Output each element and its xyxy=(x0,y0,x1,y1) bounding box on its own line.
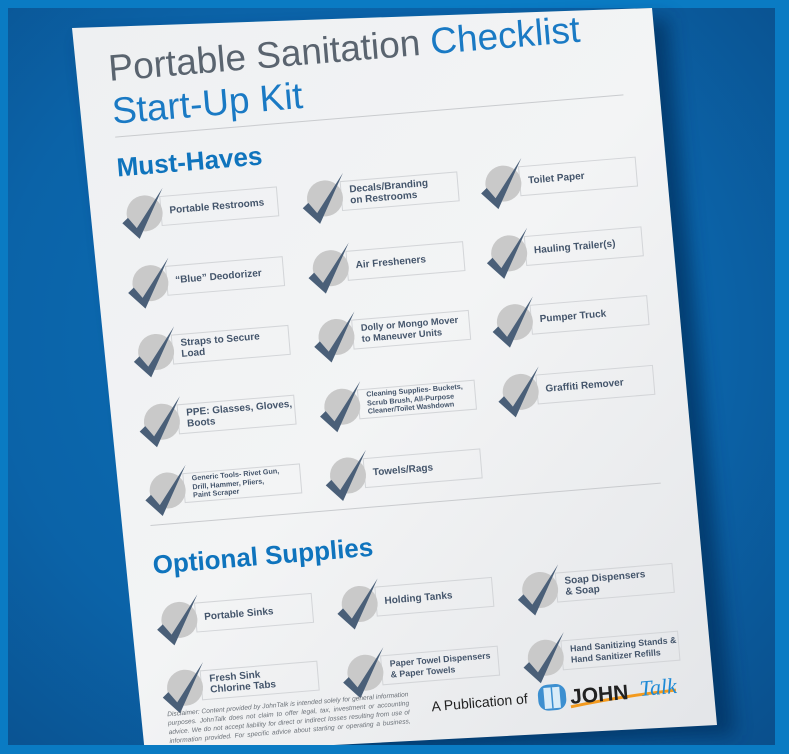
optional item: Hand Sanitizing: Hand Sanitizing Stands & xyxy=(570,635,677,654)
publication credit: A Publication of xyxy=(431,690,528,714)
checklist item: Air Fresheners xyxy=(308,241,466,294)
checklist item: Towels: Towels/Rags xyxy=(372,462,433,478)
optional item: Paper Towel Dispensers: & Paper Towels xyxy=(390,664,456,680)
optional item: Portable Sinks xyxy=(157,593,314,646)
checklist item: Portable Restrooms: Portable Restrooms xyxy=(169,197,265,216)
checklist item: PPE: PPE: Glasses, Gloves, xyxy=(186,399,293,419)
optional item: Holding Tanks: Holding Tanks xyxy=(384,590,453,606)
checklist item: Cleaning Supplies: Scrub Brush, All-Purpose xyxy=(367,391,454,407)
checklist item: Decals xyxy=(302,172,460,224)
checklist item: PPE: Boots xyxy=(187,416,216,430)
checklist item: PPE xyxy=(140,394,296,448)
checklist item: Air Fresheners: Air Fresheners xyxy=(355,254,426,271)
heading: Must-Haves: Must-Haves xyxy=(115,141,263,183)
checklist item: Pumper Truck: Pumper Truck xyxy=(539,308,607,325)
optional item: Fresh Sink: Fresh Sink xyxy=(209,669,261,685)
checklist item: Dolly: Dolly or Mongo Mover xyxy=(360,315,459,333)
checklist item: Generic Tools: Generic Tools- Rivet Gun, xyxy=(191,466,280,483)
optional item: Soap Dispensers: & Soap xyxy=(565,584,600,598)
checklist item: Dolly: to Maneuver Units xyxy=(361,327,442,344)
checklist item: Dolly xyxy=(314,310,472,362)
checklist item: Blue Deodorizer xyxy=(128,256,285,308)
checklist item: Cleaning Supplies: Cleaning Supplies- Buckets, xyxy=(366,382,463,399)
optional item: Paper Towel Dispensers: Paper Towel Dispensers xyxy=(389,650,491,669)
checklist item: Portable Restrooms xyxy=(122,186,280,239)
checklist item: Toilet Paper xyxy=(481,156,638,210)
optional item: Hand Sanitizing xyxy=(524,630,680,684)
optional item: Holding Tanks xyxy=(338,577,494,630)
optional item: Fresh Sink xyxy=(162,660,320,714)
title xyxy=(107,9,582,132)
checklist item: Graffiti Remover: Graffiti Remover xyxy=(545,377,624,394)
logo: JohnTalk: JOHN xyxy=(569,681,629,709)
optional item: Paper Towel Dispensers xyxy=(343,646,500,698)
checklist item: Toilet Paper: Toilet Paper xyxy=(528,170,585,186)
checklist item: Pumper Truck xyxy=(492,295,650,348)
optional item: Portable Sinks: Portable Sinks xyxy=(204,606,274,622)
checklist item: Blue Deodorizer: “Blue” Deodorizer xyxy=(175,267,262,286)
checklist item: Graffiti Remover xyxy=(498,365,656,418)
checklist item: Straps xyxy=(134,325,291,378)
checklist item: Towels xyxy=(326,448,483,501)
checklist item: Hauling Trailer: Hauling Trailer(s) xyxy=(534,238,616,256)
optional item: Hand Sanitizing: Hand Sanitizer Refills xyxy=(571,647,661,665)
title: Portable Sanitation Checklist xyxy=(107,9,582,89)
checklist item: Cleaning Supplies xyxy=(320,380,477,432)
optional item: Soap Dispensers: Soap Dispensers xyxy=(564,569,646,587)
checklist item: Generic Tools xyxy=(145,464,302,516)
checklist item: Cleaning Supplies: Cleaner/Toilet Washdown xyxy=(367,400,455,416)
logo: JohnTalk: Talk xyxy=(639,673,679,701)
optional item: Soap Dispensers xyxy=(518,563,675,616)
checklist item: Hauling Trailer xyxy=(487,226,644,279)
checklist item: Generic Tools: Paint Scraper xyxy=(193,487,240,500)
optional item: Fresh Sink: Chlorine Tabs xyxy=(210,679,276,696)
checklist item: Generic Tools: Drill, Hammer, Pliers, xyxy=(192,476,264,491)
checklist item: Straps: Load xyxy=(181,347,206,360)
checklist item: Decals: Decals/Branding xyxy=(349,178,428,195)
logo: JohnTalk xyxy=(538,673,679,711)
checklist item: Decals: on Restrooms xyxy=(350,190,418,206)
title: Start-Up Kit xyxy=(110,75,304,132)
heading: Optional Supplies: Optional Supplies xyxy=(152,532,374,580)
checklist item: Straps: Straps to Secure xyxy=(180,331,260,349)
